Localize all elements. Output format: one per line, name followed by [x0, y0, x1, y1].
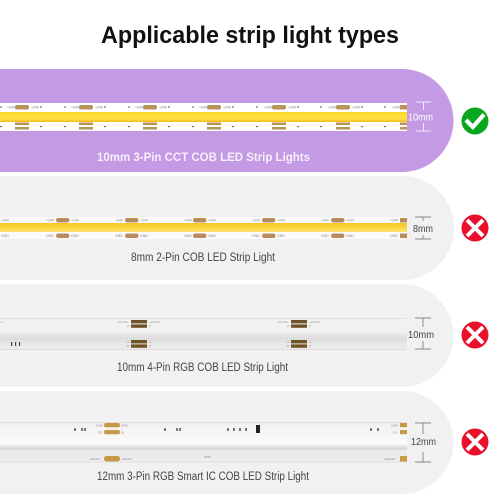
strip: 10mm RGB: +V: [0, 320, 4, 324]
strip: 10mm CCT: +24V: [31, 106, 40, 110]
strip: 8mm: GND: [115, 234, 123, 238]
strip: 12mm Smart IC: GND: [391, 424, 398, 428]
strip: 8mm: GND: [140, 234, 148, 238]
strip: 10mm CCT: +24V: [223, 106, 232, 110]
strip: 10mm RGB: R: [149, 324, 152, 328]
strip: 10mm RGB: B: [149, 344, 151, 348]
title: Applicable strip light types: [101, 22, 399, 49]
strip: 10mm RGB: +DC24V: [277, 320, 288, 324]
strip: 10mm RGB: R: [287, 324, 290, 328]
strip: 12mm Smart IC: +DC24V: [121, 457, 132, 461]
dimension: 10mm: 10mm: [408, 330, 434, 341]
strip: 8mm: +24V: [346, 218, 355, 222]
strip: 8mm: +24V: [208, 218, 217, 222]
strip: 10mm RGB: G: [127, 340, 130, 344]
strip: 10mm RGB: [0, 318, 407, 350]
strip: 10mm CCT: +24V: [95, 106, 104, 110]
strip: 8mm: +24V: [390, 218, 399, 222]
strip: 10mm CCT: +24V: [71, 106, 80, 110]
caption: 10mm 4-Pin RGB COB LED Strip Light: [117, 362, 289, 374]
strip: 10mm RGB: R: [127, 324, 130, 328]
panel: 10mm 4-pin RGB: [0, 284, 454, 387]
strip: 12mm Smart IC: GND: [96, 424, 104, 428]
icon: red cross: [462, 214, 488, 242]
strip: 10mm CCT: [0, 103, 407, 131]
strip: 12mm Smart IC: DI: [121, 430, 124, 434]
strip: 10mm RGB: G: [287, 340, 290, 344]
strip: 12mm Smart IC: +DC24V: [384, 457, 395, 461]
strip: 10mm CCT: +24V: [135, 106, 144, 110]
icon: red cross: [462, 322, 488, 348]
icon: red cross: [462, 428, 488, 456]
strip: 10mm RGB: B: [309, 344, 311, 348]
dimension: 12mm: [411, 423, 436, 462]
dimension: 8mm: 8mm: [413, 224, 433, 235]
caption: 8mm 2-Pin COB LED Strip Light: [131, 252, 276, 264]
strip: 8mm: +24V: [115, 218, 124, 222]
strip: 8mm: GND: [346, 234, 354, 238]
strip: 8mm: GND: [46, 234, 54, 238]
strip: 10mm CCT: +24V: [352, 106, 361, 110]
strip: 10mm CCT: +24V: [288, 106, 297, 110]
strip: 10mm RGB: +DC24V: [117, 320, 128, 324]
strip: 8mm: GND: [184, 234, 192, 238]
strip: 12mm Smart IC: SMD: [204, 455, 212, 459]
dimension: 10mm: [408, 102, 433, 131]
strip: 8mm: +24V: [184, 218, 193, 222]
strip: 10mm RGB: +DC24V: [309, 320, 320, 324]
strip: 8mm: GND: [321, 234, 329, 238]
strip: 8mm: GND: [71, 234, 79, 238]
strip: 10mm CCT: +24V: [264, 106, 273, 110]
strip: 10mm CCT: +24V: [328, 106, 337, 110]
strip: 10mm CCT: +24V: [392, 106, 401, 110]
dimension: 10mm: 10mm: [408, 112, 433, 124]
caption: 10mm 3-Pin CCT COB LED Strip Lights: [97, 152, 310, 164]
strip: 8mm: GND: [252, 234, 260, 238]
strip: 10mm CCT: +24V: [159, 106, 168, 110]
strip: 10mm RGB: B: [287, 344, 289, 348]
caption: 12mm 3-Pin RGB Smart IC COB LED Strip Light: [97, 471, 310, 483]
strip: 12mm Smart IC: DO: [393, 430, 398, 434]
strip: 8mm: GND: [390, 234, 398, 238]
strip: 10mm RGB: +DC24V: [149, 320, 160, 324]
strip: 10mm RGB: G: [309, 340, 312, 344]
strip: 12mm Smart IC: GND: [121, 424, 128, 428]
strip: 10mm CCT: +24V: [199, 106, 208, 110]
strip: 12mm Smart IC: DO: [98, 430, 103, 434]
strip: 8mm: +24V: [46, 218, 55, 222]
strip: 8mm: [0, 217, 407, 239]
panel: 8mm 2-pin: [0, 176, 454, 280]
strip: 8mm: +24V: [140, 218, 149, 222]
strip: 8mm: GND: [208, 234, 216, 238]
strip: 12mm Smart IC: +DC24V: [89, 457, 100, 461]
strip: 10mm RGB: G: [149, 340, 152, 344]
panel: 12mm 3-pin RGB Smart IC: [0, 391, 453, 494]
strip: 10mm CCT: +24V: [7, 106, 16, 110]
strip: 12mm Smart IC: [0, 422, 407, 462]
dimension: 10mm: [408, 318, 434, 349]
strip: 10mm RGB: B: [127, 344, 129, 348]
icon: green check: [462, 108, 488, 134]
dimension: 12mm: 12mm: [411, 437, 436, 448]
strip: 8mm: +24V: [277, 218, 286, 222]
strip: 8mm: +24V: [1, 218, 10, 222]
strip: 8mm: +24V: [71, 218, 80, 222]
strip: 8mm: GND: [277, 234, 285, 238]
strip: 8mm: +24V: [252, 218, 261, 222]
panel: 10mm 3-pin CCT: [0, 69, 454, 172]
dimension: 8mm: [413, 217, 433, 239]
strip: 10mm RGB: R: [309, 324, 312, 328]
strip: 8mm: +24V: [321, 218, 330, 222]
strip: 8mm: GND: [1, 234, 9, 238]
